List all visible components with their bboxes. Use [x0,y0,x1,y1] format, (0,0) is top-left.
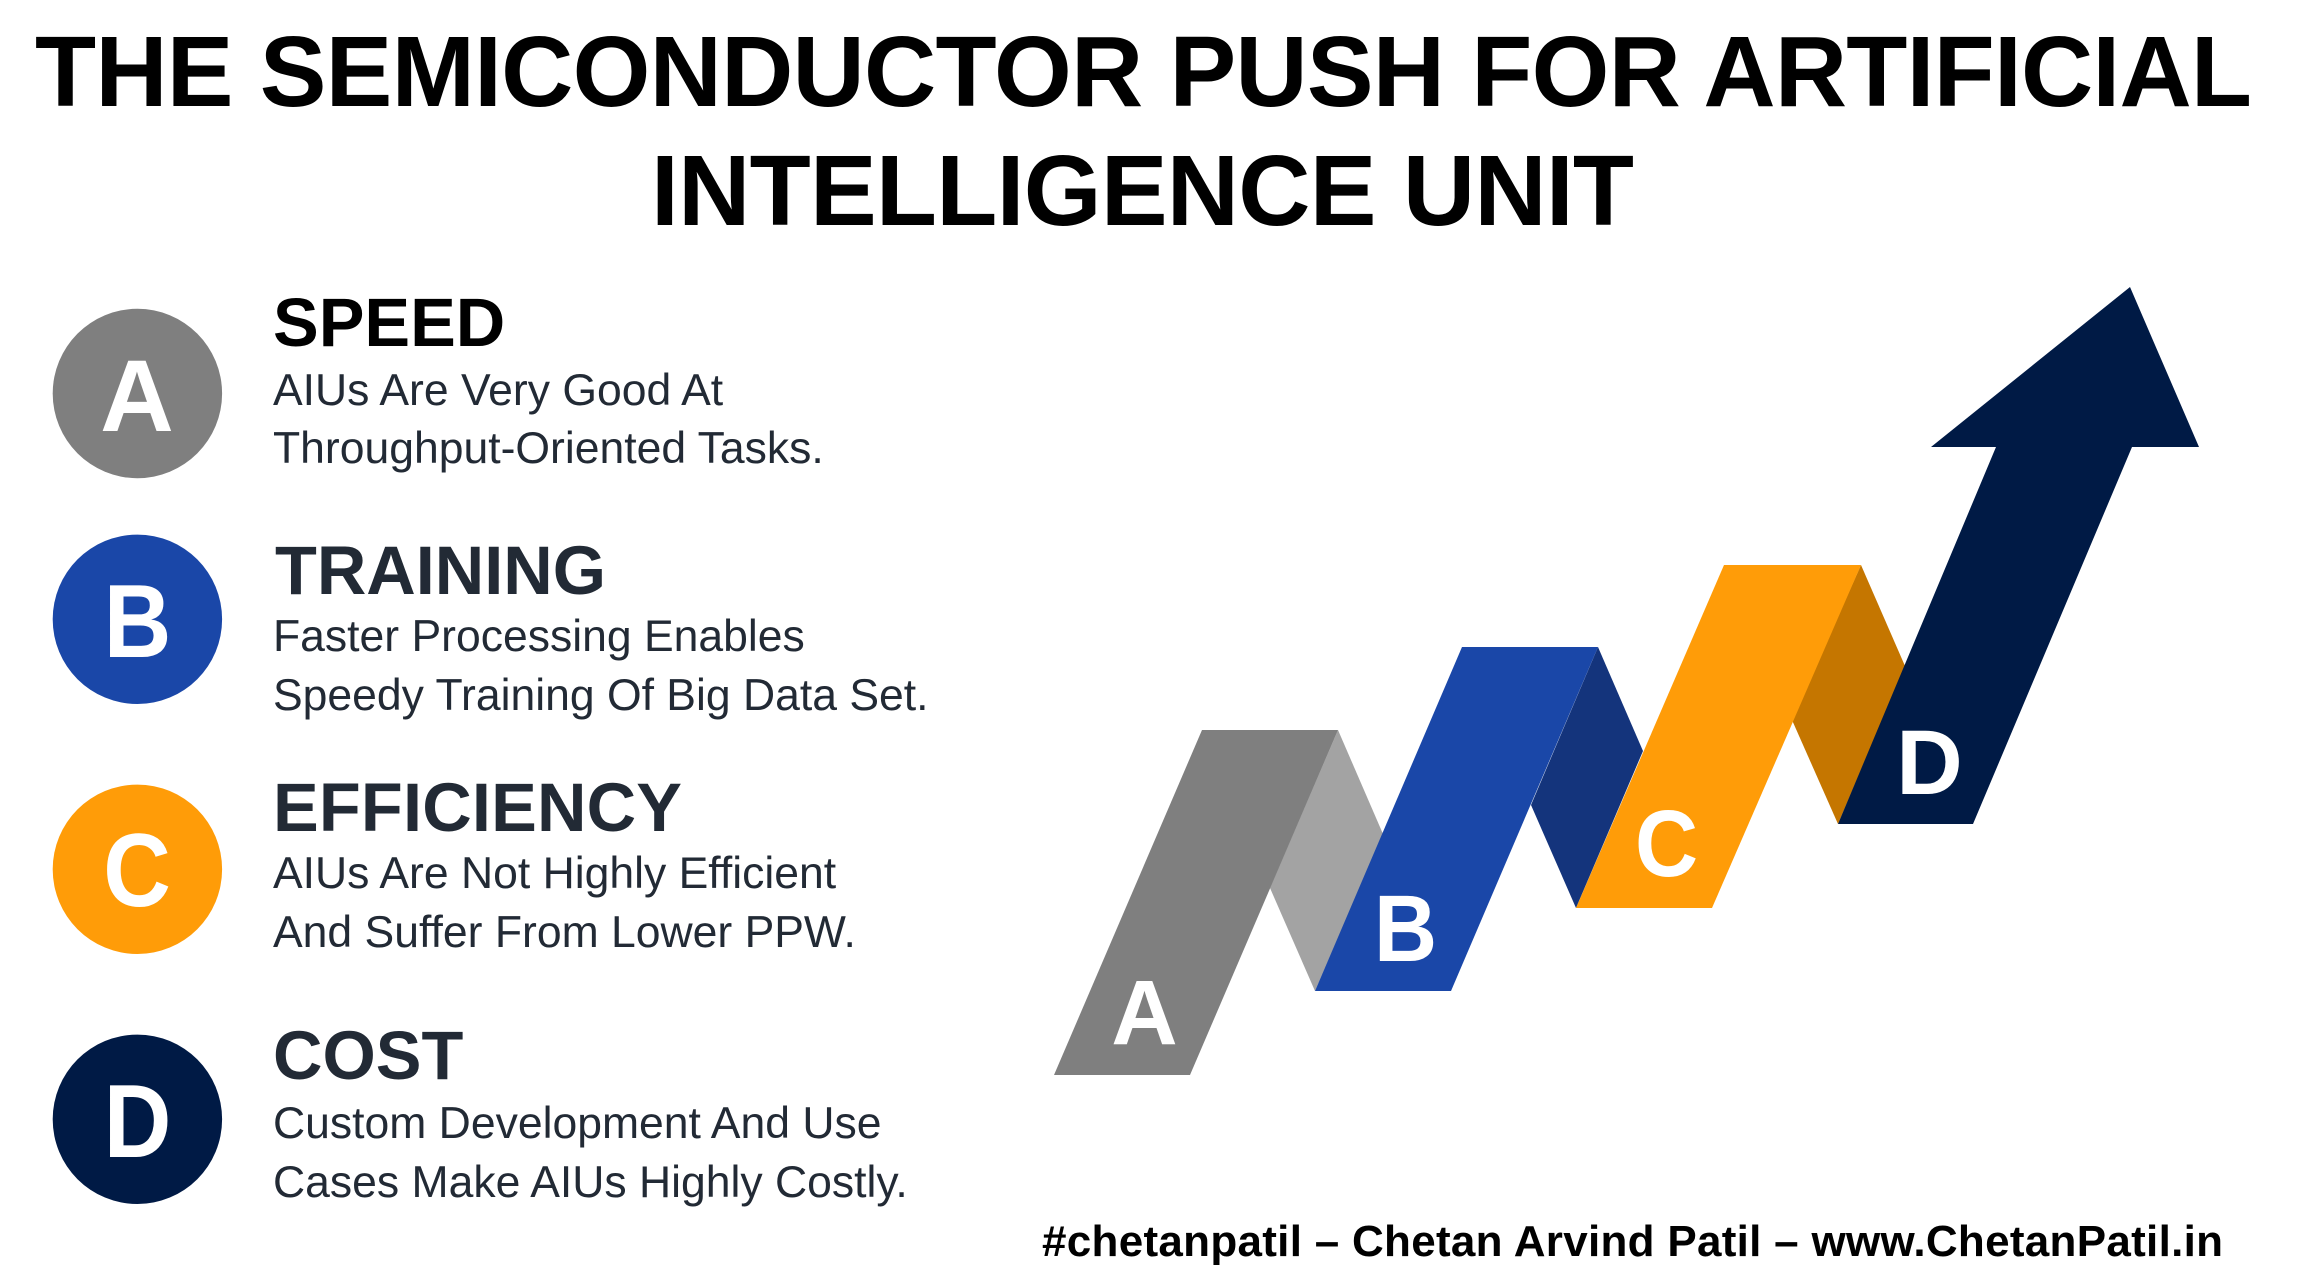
ribbon fold C [1792,565,1905,824]
heading: training: TRAINING [275,532,606,609]
heading: speed: SPEED [273,284,505,361]
icon: circle C: C [103,811,171,928]
text: speed description [273,366,824,473]
heading: cost: COST [273,1017,463,1094]
ribbon segment B: B [1374,876,1437,982]
ribbon segment A: A [1111,962,1178,1064]
item A: speed [53,284,824,478]
icon: circle C [53,785,222,954]
icon: circle B [53,535,222,704]
ribbon fold B [1531,647,1643,908]
title: THE SEMICONDUCTOR PUSH FOR ARTIFICIAL [35,16,2252,128]
title: INTELLIGENCE UNIT [651,135,1634,247]
text: speed description: AIUs Are Very Good At [273,366,724,415]
ribbon segment C: C [1635,791,1698,897]
footer credit: #chetanpatil – Chetan Arvind Patil – www.ChetanPatil.in [1042,1217,2223,1266]
panel: list of AIU factors [53,284,929,1207]
text: cost description: Cases Make AIUs Highly Costly. [273,1158,908,1207]
chart: rising ribbon arrow [1054,287,2199,1075]
title [35,16,2252,247]
text: training description: Speedy Training Of Big Data Set. [273,671,929,720]
icon: circle A [53,309,222,478]
icon: circle D [53,1035,222,1204]
icon: circle B: B [104,562,171,679]
item D: cost [53,1017,908,1207]
ribbon segment D arrow: D [1896,712,1963,814]
icon: circle D: D [104,1062,171,1179]
ribbon segment B [1315,647,1598,991]
item B: training [53,532,929,720]
ribbon fold A [1270,730,1383,991]
text: training description: Faster Processing Enables [273,612,805,661]
text: cost description: Custom Development And Use [273,1099,881,1148]
text: training description [273,612,929,720]
text: cost description [273,1099,908,1207]
icon: circle A: A [100,339,174,453]
text: speed description: Throughput-Oriented Tasks. [273,424,824,473]
ribbon segment C [1576,565,1861,908]
ribbon segment D arrow [1838,287,2199,824]
ribbon segment A [1054,730,1338,1075]
text: efficiency description [273,849,856,957]
text: efficiency description: AIUs Are Not Highly Efficient [273,849,837,898]
text: efficiency description: And Suffer From Lower PPW. [273,908,856,957]
item C: efficiency [53,769,856,957]
heading: efficiency: EFFICIENCY [273,769,682,846]
